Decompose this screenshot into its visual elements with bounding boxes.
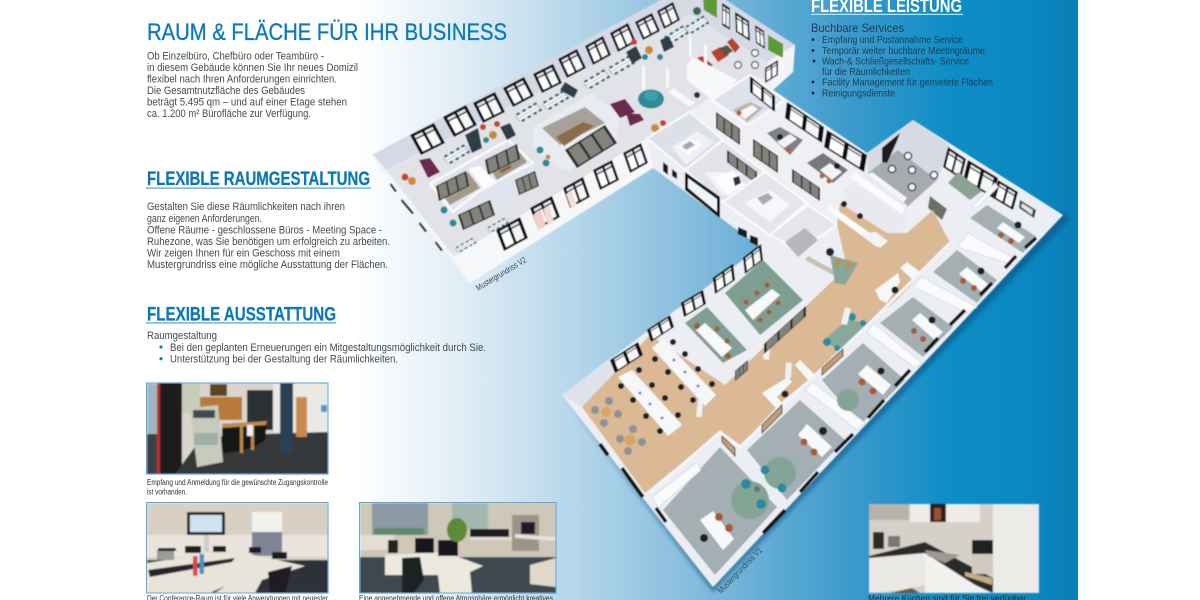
bathroom west: [647, 112, 723, 170]
intro text: Ob Einzelbüro, Chefbüro oder Teambüro -: [147, 50, 324, 62]
north east offices: [767, 102, 867, 184]
lounge furniture: [402, 36, 758, 226]
door panels: [722, 349, 843, 456]
raumgestaltung text: Offene Räume - geschlossene Büros - Meeting Space -: [147, 224, 382, 236]
large partition unit: [843, 173, 907, 233]
desks: [700, 222, 1025, 550]
reception chairs: [782, 286, 898, 398]
services list: Facility Management für gemietete Flächen: [822, 76, 993, 88]
raumgestaltung text: ganz eigenen Anforderungen.: [147, 213, 262, 225]
cafe bench: [867, 172, 907, 203]
central front windows: [685, 172, 720, 218]
services list: Reinigungsdienste: [822, 88, 895, 100]
counter chair: [694, 92, 700, 98]
raumgestaltung text: Mustergrundriss eine mögliche Ausstattung der Flächen.: [147, 259, 388, 271]
caption reception: ist vorhanden.: [147, 488, 187, 496]
cafe tables: [734, 50, 758, 68]
intro text: [147, 50, 358, 120]
ausstattung list: Raumgestaltung: [147, 330, 217, 342]
room walls: [533, 94, 620, 170]
intro text: beträgt 5.495 qm – und auf einer Etage stehen: [147, 96, 347, 108]
outer wall window slots: [600, 238, 1036, 533]
room outer walls: [430, 140, 535, 230]
cafe floor: [868, 150, 937, 207]
right room floor: [485, 150, 527, 180]
front wall windows: [496, 143, 648, 251]
desk monitors: [639, 359, 699, 419]
ausstattung list: [147, 330, 486, 366]
room floor: [542, 107, 605, 145]
meeting room west: [430, 140, 539, 230]
upper wing left wall: [372, 155, 470, 283]
central rooms: [647, 75, 867, 257]
left wall window slots: [390, 183, 443, 251]
small carpet: [830, 255, 858, 285]
meeting room east: [533, 94, 620, 170]
caption reception: [147, 478, 328, 496]
lower wing rear windows: [610, 342, 643, 373]
counter units: [642, 35, 737, 107]
green meeting rooms: [685, 260, 806, 381]
glass door: [928, 196, 947, 220]
raumgestaltung text: Gestalten Sie diese Räumlichkeiten nach ihren: [147, 201, 345, 213]
wood corridor floor: [582, 203, 950, 493]
sofas: [697, 38, 740, 68]
intro text: Die Gesamtnutzfläche des Gebäudes: [147, 85, 305, 97]
upper wing back wall: [372, 0, 795, 172]
dark sofa and cafe groups: [465, 36, 674, 153]
potted plant: [693, 7, 701, 15]
services list: Temporär weiter buchbare Meetingräume: [822, 45, 985, 57]
intro text: ca. 1.200 m² Bürofläche zur Verfügung.: [147, 108, 311, 120]
photo: conference room: [146, 502, 328, 593]
lobby desks near corridor: [805, 201, 888, 285]
intro text: flexibel nach Ihren Anforderungen einrichten.: [147, 74, 337, 86]
plan label V2: Mustergrundriss V2: [474, 255, 528, 293]
desk chairs: [618, 339, 715, 434]
cafe room: [843, 120, 1018, 233]
round teal seat: [638, 90, 664, 108]
corridor side wall: [650, 243, 950, 493]
cafe tables: [888, 152, 938, 191]
ausstattung list: Unterstützung bei der Gestaltung der Räumlichkeiten.: [170, 354, 398, 366]
open plan desks: [442, 15, 710, 253]
green wall plants: [703, 0, 783, 58]
central white core: [468, 166, 497, 190]
back wall windows: [410, 2, 778, 155]
round tables with seats: [601, 407, 636, 446]
services list: für die Räumlichkeiten: [822, 66, 910, 78]
raumgestaltung text: Wir zeigen Ihnen für ein Geschoss mit einem: [147, 248, 340, 260]
glass west room: [515, 171, 539, 195]
dark glass partitions: [716, 112, 820, 201]
bathroom centre: [685, 140, 765, 202]
sink room east: [723, 172, 807, 235]
services list: Empfang und Postannahme Service: [822, 34, 963, 46]
building base: [372, 0, 1063, 587]
dark corner window: [882, 133, 900, 163]
office a: [712, 75, 785, 125]
left meeting room: [685, 307, 747, 363]
photo: kitchen: [869, 504, 1039, 593]
kitchenette unit: [806, 240, 842, 275]
intro text: in diesem Gebäude können Sie Ihr neues Domizil: [147, 62, 358, 74]
caption reception: Empfang und Anmeldung für die gewünschte Zugangskontrolle: [147, 478, 328, 487]
orange chairs: [715, 232, 1014, 532]
lounge chairs: [823, 313, 866, 351]
burgundy seating: [419, 99, 644, 178]
office cabinets: [652, 183, 1017, 508]
wing end wall: [767, 45, 795, 90]
hallway floor: [690, 75, 867, 225]
photo: reception: [146, 383, 328, 474]
title: RAUM & FLÄCHE FÜR IHR BUSINESS: [147, 19, 507, 46]
open office wing: [562, 244, 763, 455]
heading flexible raumgestaltung: FLEXIBLE RAUMGESTALTUNG: [147, 169, 370, 190]
services list: Buchbare Services: [811, 21, 904, 35]
wall screen: [1019, 200, 1036, 218]
plan label V1: Mustergrundriss V1: [715, 545, 764, 595]
offices along outer wall: [650, 183, 1037, 575]
services list: Wach-& Schließgesellschafts- Service: [822, 56, 969, 68]
office floors: [663, 205, 1037, 575]
glass wall: [565, 125, 617, 168]
cafe back wall: [867, 120, 950, 180]
floor plan illustration: [372, 0, 1070, 595]
north windows: [750, 76, 775, 112]
raumgestaltung text: Ruhezone, was Sie benötigen um erfolgreich zu arbeiten.: [147, 236, 390, 248]
raumgestaltung text: [147, 201, 390, 271]
heading flexible ausstattung: FLEXIBLE AUSSTATTUNG: [147, 304, 336, 326]
photo: open office: [360, 502, 556, 593]
lounge carpet: [822, 320, 870, 350]
rear wall face: [562, 358, 625, 407]
left room floor: [437, 172, 480, 205]
services list: [811, 21, 993, 100]
upper wing front wall: [453, 138, 653, 283]
black chairs: [700, 222, 1022, 542]
ausstattung list: Bei den geplanten Erneuerungen ein Mitgestaltungsmöglichkeit durch Sie.: [170, 342, 486, 354]
upper wing floor: [385, 14, 773, 257]
teal chairs: [741, 466, 786, 509]
wall top edge: [430, 140, 533, 212]
small grey room: [770, 205, 837, 250]
small green nook: [948, 172, 982, 200]
glass doors: [764, 306, 806, 354]
right meeting room: [725, 260, 803, 335]
offices windows: [785, 102, 824, 143]
pillars: [696, 307, 851, 417]
long desks: [618, 339, 716, 436]
corridor reception desks: [762, 262, 920, 409]
floor plan body: [372, 0, 1063, 587]
building shadow: [562, 214, 1070, 592]
corridor lounge: [696, 307, 870, 417]
round carpets: [731, 389, 859, 519]
